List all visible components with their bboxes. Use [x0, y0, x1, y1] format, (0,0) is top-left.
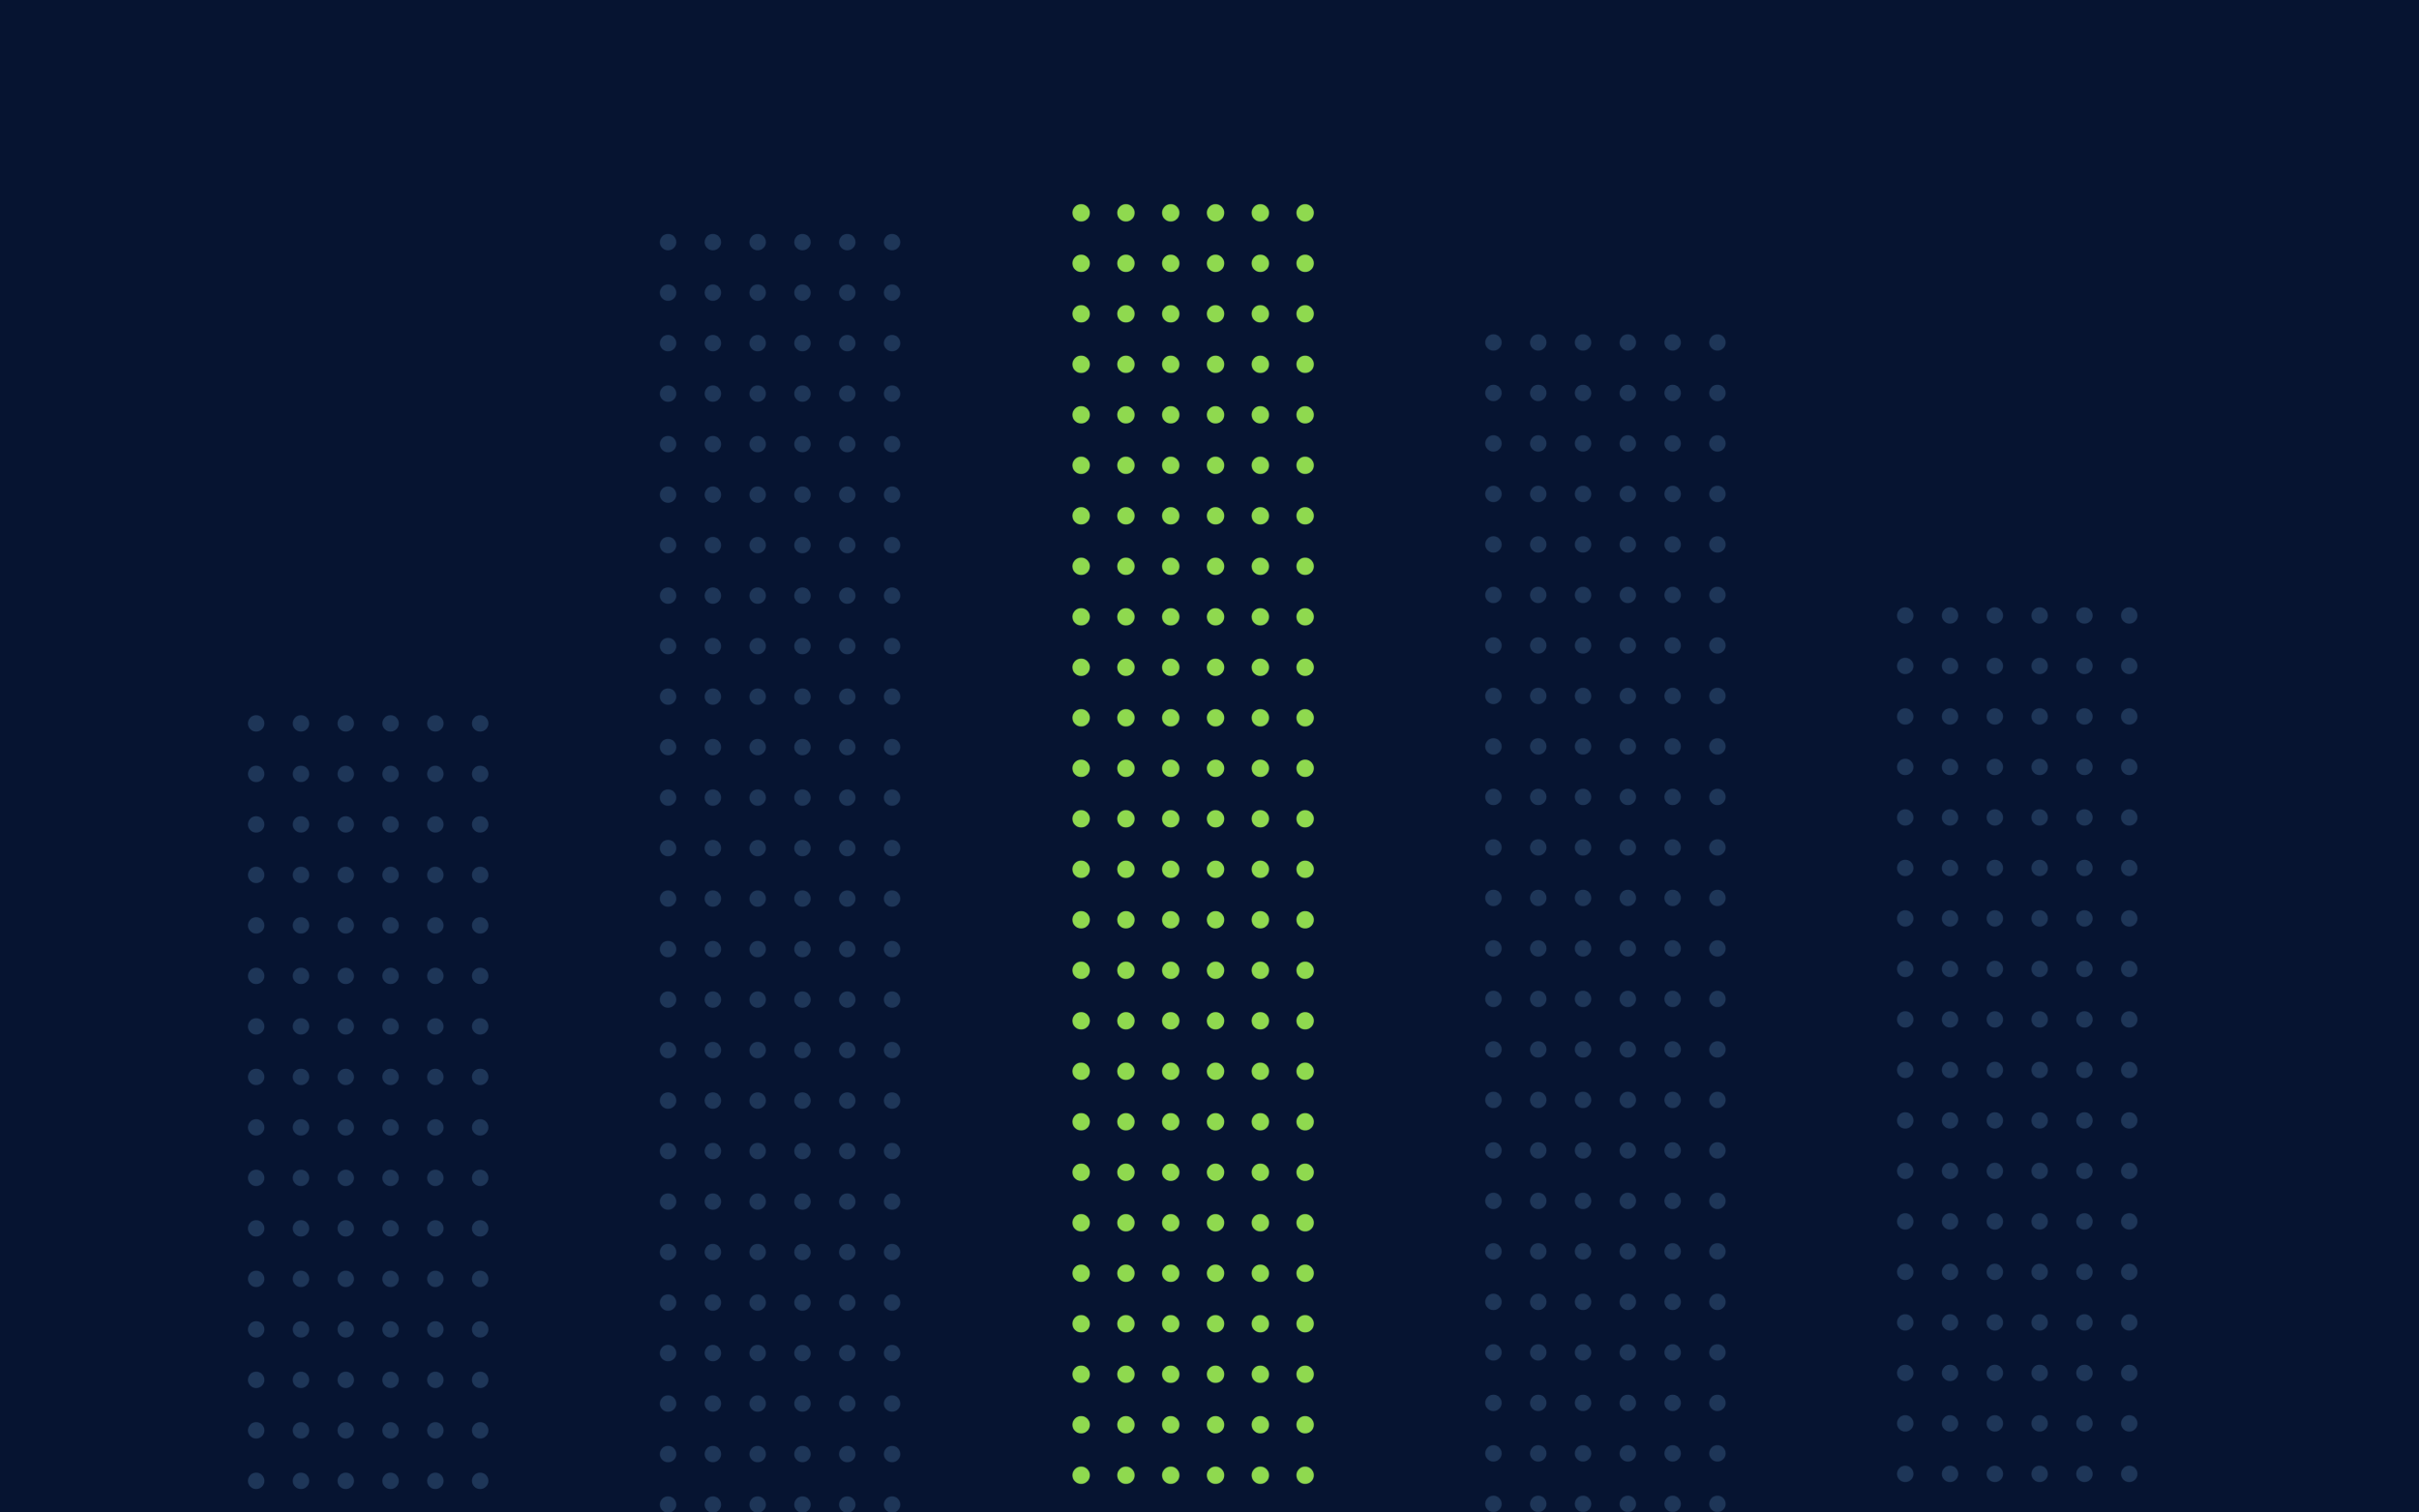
- column 4: [1471, 317, 1740, 1512]
- column 5: [1883, 590, 2152, 1499]
- column 1: [234, 698, 502, 1506]
- column 2: [645, 217, 914, 1512]
- column 3 (highlighted): [1059, 188, 1328, 1500]
